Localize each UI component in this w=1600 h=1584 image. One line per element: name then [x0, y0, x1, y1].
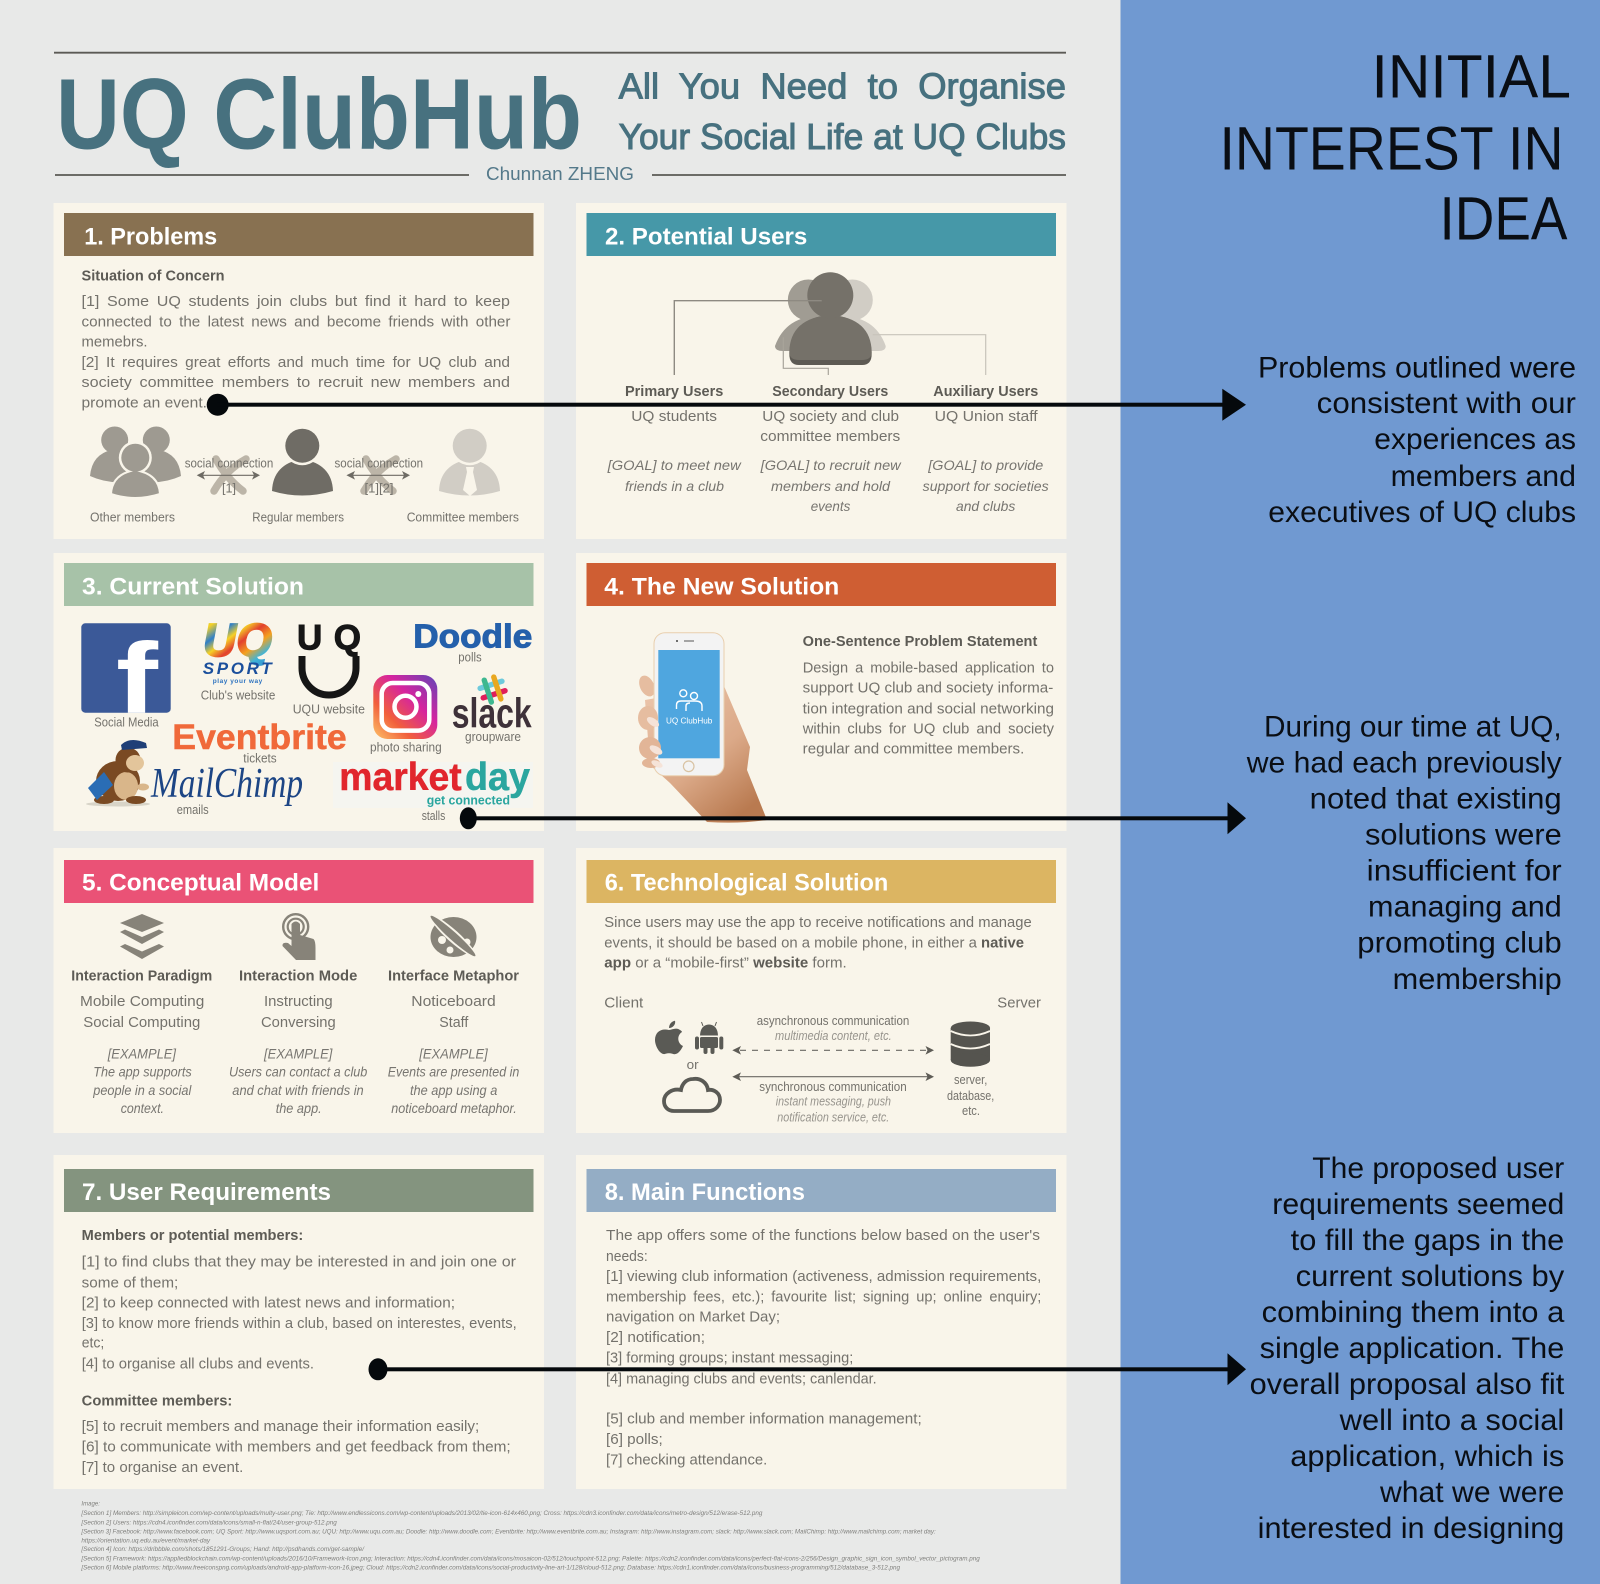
label: server database: server,: [954, 1073, 987, 1087]
sidebar note: requirements: what we were: [1379, 1476, 1564, 1509]
heading: conceptual model: 5. Conceptual Model: [82, 870, 319, 897]
sidebar note: problems: consistent with our: [1317, 387, 1576, 420]
labels: member types: Regular members: [252, 511, 344, 525]
diagram: synchronous link: synchronous communication: [759, 1080, 907, 1094]
icon: cloud: [664, 1079, 720, 1111]
column: interaction mode: Interaction Mode: [239, 968, 357, 984]
column: secondary users: UQ society and club: [762, 408, 899, 425]
column: auxiliary users: support for societies: [923, 478, 1049, 494]
icon: touch: [282, 914, 316, 960]
logo: facebook: [81, 623, 171, 735]
text: committee requirements: Committee members:: [82, 1393, 232, 1409]
icon: connection arrow with cross 1: [185, 457, 273, 496]
text: functions list: membership fees, etc.); favourite list; signing up; online enquiry;: [606, 1288, 1041, 1305]
text: situation of concern: Situation of Concern: [82, 268, 224, 284]
text: member requirements: Members or potential members:: [82, 1228, 303, 1244]
column: interaction paradigm: Mobile Computing: [80, 993, 204, 1010]
sidebar note: requirements: current solutions by: [1296, 1260, 1564, 1293]
text: technology description: [604, 914, 1032, 972]
column: interaction paradigm: Social Computing: [83, 1014, 200, 1031]
heading: conceptual model: [64, 860, 534, 903]
icon: committee member: [439, 426, 500, 496]
column: interface metaphor: [EXAMPLE]: [418, 1045, 489, 1061]
text: functions list: navigation on Market Day;: [606, 1308, 780, 1325]
logo: facebook: Social Media: [94, 716, 159, 730]
text: functions list: [606, 1227, 1041, 1468]
heading: user requirements: 7. User Requirements: [82, 1179, 331, 1206]
column: secondary users: events: [811, 498, 850, 514]
sidebar note: solutions: [1246, 710, 1562, 996]
footer: image credits: [Section 4] Icon: https://dribbble.com/shots/1851291-Groups; Hand: http://psdhands.com/get-sample/: [80, 1546, 365, 1553]
text: situation of concern: [1] Some UQ students join clubs but find it hard to keep: [82, 293, 510, 310]
footer: image credits: [80, 1501, 980, 1571]
column: interaction paradigm: context.: [121, 1100, 164, 1116]
header: title block: [54, 53, 1066, 184]
icon: connection arrow with cross 2: [1][2]: [364, 482, 394, 496]
text: functions list: [3] forming groups; instant messaging;: [606, 1350, 853, 1367]
icon: layers: [120, 914, 164, 959]
column: interaction mode: and chat with friends in: [232, 1082, 364, 1098]
sidebar note: solutions: solutions were: [1365, 819, 1562, 852]
sidebar note: requirements: requirements seemed: [1272, 1188, 1564, 1221]
text: member requirements: etc;: [82, 1335, 104, 1352]
text: committee requirements: [6] to communicate with members and get feedback from them;: [82, 1439, 511, 1456]
label: server: Server: [997, 995, 1041, 1012]
sidebar note: requirements: combining them into a: [1262, 1296, 1565, 1329]
sidebar note: problems: [1258, 351, 1576, 529]
sidebar note: solutions: insufficient for: [1367, 855, 1562, 888]
sidebar note: solutions: membership: [1393, 963, 1562, 996]
logo: mailchimp: emails: [177, 803, 209, 817]
logo: market day: stalls: [422, 809, 445, 823]
panel: 3. Current Solution: [54, 553, 544, 831]
logo: UQ sport: play your way: [213, 678, 263, 685]
illustration: hand holding phone: UQ ClubHub: [666, 715, 713, 725]
heading: problems: [64, 213, 534, 256]
column: interaction mode: Instructing: [264, 993, 333, 1010]
column: auxiliary users: [923, 384, 1049, 514]
footer: image credits: [Section 2] Users: https://cdn4.iconfinder.com/data/icons/small-n-flat/24/user-group-512.png: [80, 1519, 337, 1526]
text: functions list: [4] managing clubs and events; canlendar.: [606, 1370, 877, 1387]
icon: user group with leader lines: [674, 272, 986, 375]
column: interaction paradigm: Interaction Paradigm: [71, 968, 212, 984]
text: situation of concern: memebrs.: [82, 333, 148, 350]
diagram: synchronous link: [732, 1072, 934, 1125]
footer: image credits: [Section 3] Facebook: http://www.facebook.com; UQ Sport: http://www.uqsport.com.au; UQU: http://www.uqu.com.au; Doodle: http://www.doodle.com; Eventbrite: http://www.eventbrite.com.au; Instagram: http://www.instagram.com; slack: http://www.slack.com; MailChimp: http://www.mailchimp.com; market day:: [80, 1528, 936, 1535]
logo: UQ sport: Club's website: [201, 688, 275, 702]
text: functions list: The app offers some of the functions below based on the user's: [606, 1227, 1040, 1244]
text: member requirements: [4] to organise all clubs and events.: [82, 1356, 314, 1373]
logo: slack: groupware: [465, 730, 521, 744]
sidebar note: problems: experiences as: [1374, 423, 1576, 456]
sidebar note: requirements: interested in designing: [1258, 1512, 1564, 1545]
heading: technological solution: 6. Technological Solution: [605, 870, 888, 897]
sidebar note: solutions: we had each previously: [1246, 746, 1562, 779]
heading: potential users: [586, 213, 1056, 256]
text: member requirements: [3] to know more friends within a club, based on interestes, events,: [82, 1315, 517, 1332]
heading: new solution: [586, 563, 1056, 606]
label: client: Client: [604, 995, 644, 1012]
column: interaction mode: Users can contact a club: [229, 1064, 367, 1080]
sidebar note: solutions: noted that existing: [1310, 782, 1562, 816]
text: technology description: app or a “mobile-first” website form.: [604, 955, 847, 972]
logo: UQ sport: [201, 614, 275, 702]
diagram: synchronous link: instant messaging, push: [776, 1095, 891, 1109]
sidebar note: problems: members and: [1391, 460, 1576, 493]
text: problem statement: Design a mobile-based application to: [803, 660, 1054, 677]
column: interaction paradigm: The app supports: [93, 1064, 192, 1080]
column: interaction mode: the app.: [276, 1100, 322, 1116]
arrow: problems to note: [207, 389, 1246, 421]
column: auxiliary users: and clubs: [956, 498, 1015, 514]
sidebar note: requirements: [1250, 1152, 1565, 1545]
sidebar note: requirements: to fill the gaps in the: [1291, 1224, 1564, 1257]
panel: 5. Conceptual Model: [54, 848, 544, 1133]
icon: connection arrow with cross 1: [1]: [222, 482, 236, 496]
logo: slack: [452, 675, 532, 744]
panel: 7. User Requirements: [54, 1155, 544, 1489]
footer: image credits: [Section 1] Members: http://simpleicon.com/wp-content/uploads/multy-user.png; Tie: http://www.endlessicons.com/wp-content/uploads/2013/02/tie-icon-614x460.png; Cross: https://cdn3.iconfinder.com/data/icons/metro-design/512/erase-512.png: [80, 1510, 763, 1517]
icon: regular member: [272, 426, 333, 496]
logo: eventbrite: tickets: [243, 752, 277, 766]
column: auxiliary users: UQ Union staff: [935, 408, 1039, 425]
label: server database: database,: [947, 1089, 994, 1103]
column: primary users: [607, 384, 742, 494]
text: member requirements: [2] to keep connected with latest news and information;: [82, 1294, 455, 1311]
sidebar title: INTEREST IN: [1220, 114, 1564, 182]
heading: user requirements: [64, 1169, 534, 1212]
logo: slack: slack: [452, 689, 532, 736]
column: auxiliary users: Auxiliary Users: [933, 384, 1038, 400]
sidebar note: solutions: managing and: [1368, 891, 1562, 924]
logo: facebook: f: [116, 623, 159, 735]
subtitle: All You Need to Organise: [619, 65, 1066, 106]
text: situation of concern: promote an event.: [82, 395, 207, 412]
logo: instagram: [370, 675, 442, 755]
column: interface metaphor: [388, 968, 519, 1116]
column: interface metaphor: Noticeboard: [411, 993, 496, 1010]
text: member requirements: [82, 1228, 517, 1373]
logo: doodle: Doodle: [413, 618, 532, 655]
footer: image credits: Image:: [81, 1501, 100, 1508]
panel: 1. Problems: [54, 203, 544, 539]
column: interface metaphor: Events are presented in: [388, 1064, 519, 1080]
text: functions list: [7] checking attendance.: [606, 1451, 767, 1468]
logo: UQU: [293, 618, 365, 716]
title: UQ ClubHub: [56, 58, 582, 170]
icon: android: [695, 1022, 723, 1054]
heading: main functions: [586, 1169, 1056, 1212]
column: primary users: UQ students: [631, 408, 717, 425]
text: functions list: [2] notification;: [606, 1329, 705, 1346]
logo: doodle: polls: [458, 651, 482, 665]
text: technology description: Since users may use the app to receive notifications and manage: [604, 914, 1032, 931]
labels: member types: Other members: [90, 511, 175, 525]
text: problem statement: regular and committee members.: [803, 741, 1024, 758]
text: situation of concern: society committee members to recruit new members and: [82, 374, 510, 391]
logo: eventbrite: Eventbrite: [172, 718, 347, 757]
text: situation of concern: [82, 268, 511, 412]
heading: technological solution: [586, 860, 1056, 903]
heading: problems: 1. Problems: [84, 223, 217, 250]
text: committee requirements: [7] to organise an event.: [82, 1459, 243, 1476]
text: problem statement: support UQ club and society informa-: [803, 680, 1053, 697]
column: interaction paradigm: [EXAMPLE]: [107, 1045, 177, 1061]
text: problem statement: tion integration and social networking: [803, 700, 1054, 717]
text: committee requirements: [82, 1393, 511, 1476]
logo: mailchimp: [86, 740, 303, 817]
heading: potential users: 2. Potential Users: [605, 223, 807, 250]
column: secondary users: Secondary Users: [772, 384, 888, 400]
label: server database: etc.: [962, 1104, 980, 1118]
column: primary users: friends in a club: [625, 478, 724, 494]
sidebar title: INITIAL: [1372, 43, 1571, 111]
text: functions list: [5] club and member information management;: [606, 1410, 922, 1427]
sidebar note: solutions: promoting club: [1357, 927, 1562, 960]
sidebar note: requirements: well into a social: [1339, 1404, 1564, 1437]
labels: member types: [90, 511, 519, 525]
sidebar note: problems: Problems outlined were: [1258, 351, 1576, 384]
text: functions list: [6] polls;: [606, 1431, 663, 1448]
sidebar note: requirements: single application. The: [1260, 1332, 1564, 1365]
column: interaction paradigm: people in a social: [92, 1082, 192, 1098]
diagram: synchronous link: notification service, etc.: [777, 1111, 889, 1125]
panel: 8. Main Functions: [576, 1155, 1066, 1489]
text: member requirements: some of them;: [82, 1274, 178, 1291]
icon: connection arrow with cross 1: social connection: [185, 457, 273, 471]
logo: market day: get connected: [427, 792, 510, 807]
text: problem statement: [802, 634, 1054, 758]
icon: connection arrow with cross 2: [334, 457, 423, 496]
logo: market day: day: [465, 756, 530, 799]
icon: palette: [427, 911, 479, 961]
heading: current solution: [64, 563, 534, 606]
column: secondary users: [760, 384, 902, 514]
sidebar note: requirements: The proposed user: [1312, 1152, 1564, 1185]
text: situation of concern: [2] It requires great efforts and much time for UQ club and: [82, 354, 510, 371]
column: secondary users: members and hold: [771, 478, 891, 494]
text: problem statement: within clubs for UQ club and society: [802, 720, 1054, 737]
logo: instagram: photo sharing: [370, 741, 442, 755]
sidebar note: solutions: During our time at UQ,: [1264, 710, 1562, 743]
icon: apple: [655, 1021, 683, 1054]
column: interface metaphor: Staff: [439, 1014, 469, 1031]
column: secondary users: [GOAL] to recruit new: [760, 457, 902, 473]
column: interface metaphor: Interface Metaphor: [388, 968, 519, 984]
heading: new solution: 4. The New Solution: [604, 573, 839, 600]
arrow: requirements to note: [368, 1353, 1246, 1385]
panel: 4. The New Solution: [576, 553, 1066, 831]
author: Chunnan ZHENG: [486, 163, 634, 184]
logo: UQ sport: SPORT: [203, 659, 273, 678]
text: committee requirements: [5] to recruit members and manage their information easily;: [82, 1418, 479, 1435]
column: auxiliary users: [GOAL] to provide: [927, 457, 1044, 473]
logo: UQ sport: UQ: [203, 614, 272, 666]
label: server database: [947, 1073, 994, 1118]
logo: market day: market: [339, 756, 462, 799]
diagram: asynchronous link: multimedia content, etc.: [775, 1029, 892, 1043]
footer: image credits: [Section 5] Framework: https://appliedblockchain.com/wp-content/uploads/2016/10/Framework-Icon.png; Interaction: https://cdn4.iconfinder.com/data/icons/mosaicon-02/512/touchpoint-512.png; Palette: https://cdn2.iconfinder.com/data/icons/perfect-flat-icons-2/256/Design_graphic_sign_icon_symbol_vector_pictogram.png: [80, 1555, 980, 1562]
sidebar title: [1220, 43, 1571, 252]
label: or: or: [687, 1058, 699, 1072]
heading: main functions: 8. Main Functions: [605, 1179, 805, 1206]
sidebar note: requirements: overall proposal also fit: [1250, 1368, 1565, 1401]
column: secondary users: committee members: [760, 428, 900, 445]
column: primary users: [GOAL] to meet new: [607, 457, 742, 473]
logo: market day: [333, 756, 533, 823]
logo: mailchimp: MailChimp: [150, 761, 303, 807]
sidebar note: requirements: application, which is: [1290, 1440, 1564, 1473]
footer: image credits: https://orientation.uq.edu.au/event/market-day: [81, 1537, 211, 1544]
labels: member types: Committee members: [407, 511, 519, 525]
logo: UQU: UQ: [297, 618, 361, 658]
subtitle: [619, 65, 1066, 157]
column: interface metaphor: the app using a: [410, 1082, 497, 1098]
diagram: asynchronous link: [732, 1014, 934, 1055]
footer: image credits: [Section 6] Mobile platforms: http://www.freeiconspng.com/uploads/android-app-platform-icon-16.jpeg; Cloud: https://cdn2.iconfinder.com/data/icons/social-productivity-line-art-1/128/cloud-512.png; Database: https://cdn1.iconfinder.com/data/icons/business-programming/512/database_3-512.png: [80, 1564, 900, 1571]
arrow: current solutions to note: [460, 802, 1246, 834]
heading: current solution: 3. Current Solution: [82, 573, 304, 600]
text: member requirements: [1] to find clubs that they may be interested in and join one or: [82, 1254, 516, 1271]
panel: initial interest sidebar: [1120, 0, 1600, 1584]
sidebar note: problems: executives of UQ clubs: [1268, 496, 1576, 529]
sidebar title: IDEA: [1440, 184, 1568, 252]
subtitle: Your Social Life at UQ Clubs: [619, 116, 1066, 157]
column: interaction mode: [229, 968, 367, 1116]
column: interaction mode: Conversing: [261, 1014, 336, 1031]
text: functions list: [1] viewing club information (activeness, admission requirements,: [606, 1268, 1041, 1285]
column: interaction paradigm: [71, 968, 212, 1116]
panel: 6. Technological Solution: [576, 848, 1066, 1133]
illustration: hand holding phone: [636, 633, 767, 823]
text: problem statement: One-Sentence Problem Statement: [803, 634, 1037, 650]
diagram: asynchronous link: asynchronous communication: [757, 1014, 909, 1028]
text: functions list: needs:: [606, 1248, 648, 1265]
logo: UQU: UQU website: [293, 702, 365, 716]
column: interface metaphor: noticeboard metaphor.: [391, 1100, 517, 1116]
text: situation of concern: connected to the latest news and become friends with other: [82, 314, 511, 331]
icon: connection arrow with cross 2: social connection: [334, 457, 423, 471]
column: primary users: Primary Users: [625, 384, 723, 400]
panel: 2. Potential Users: [576, 203, 1066, 539]
column: interaction mode: [EXAMPLE]: [263, 1045, 333, 1061]
icon: other members: [90, 426, 181, 498]
text: technology description: events, it should be based on a mobile phone, in either a native: [604, 935, 1024, 952]
icon: database: [951, 1022, 990, 1067]
